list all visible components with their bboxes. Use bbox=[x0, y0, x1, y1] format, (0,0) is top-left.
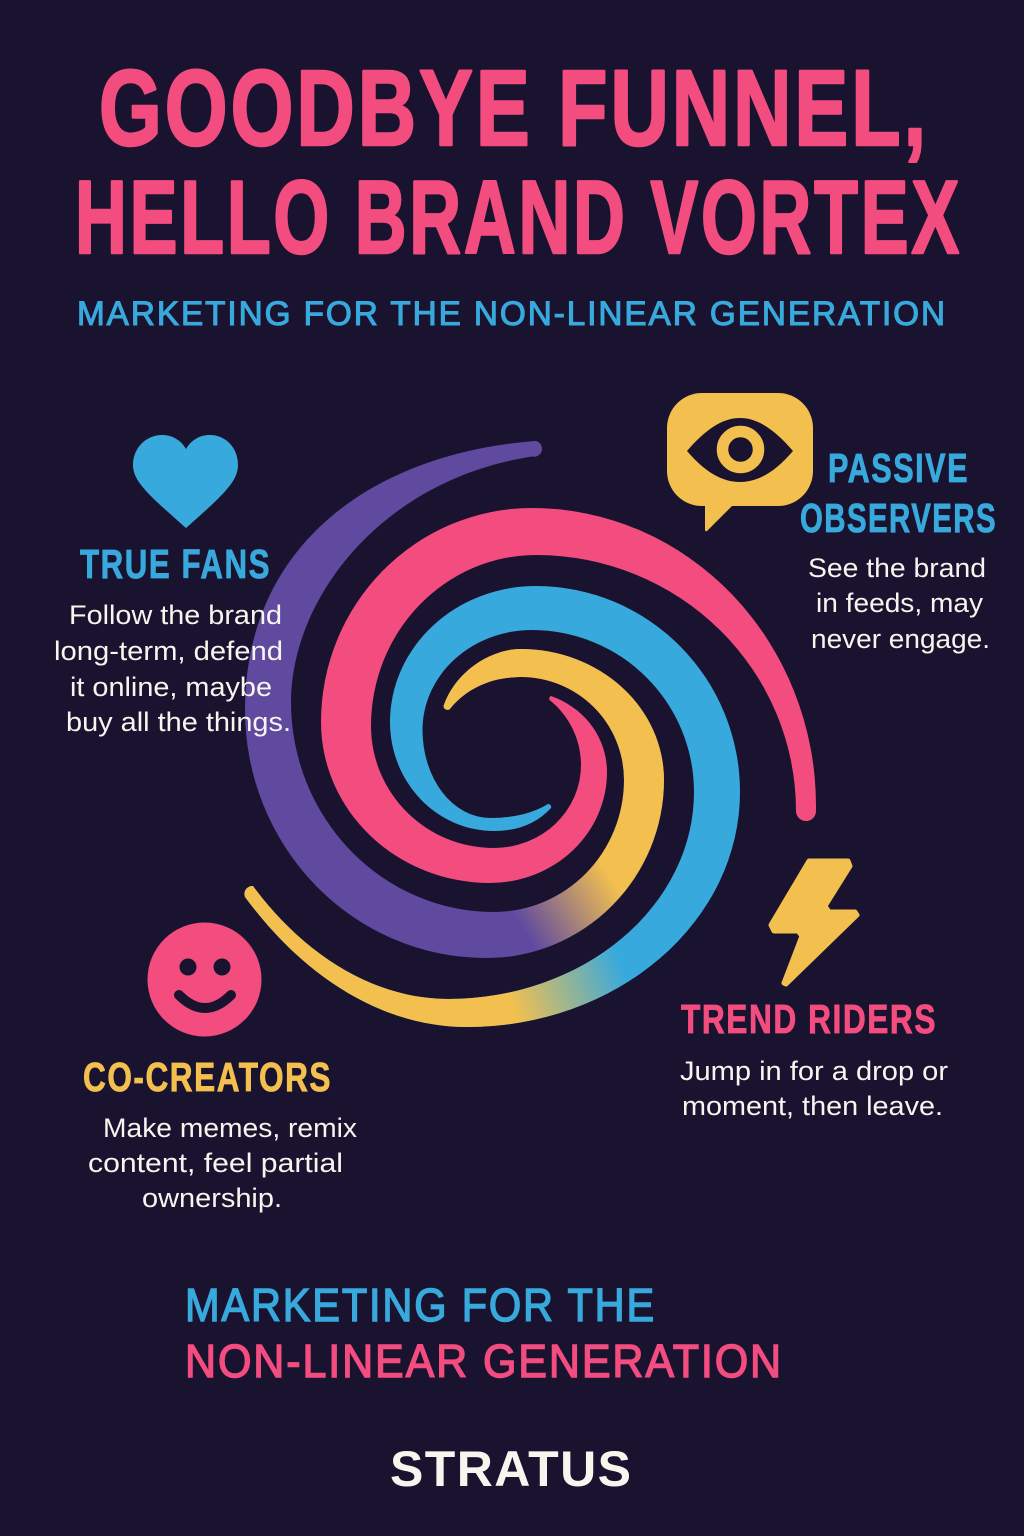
closing tagline: MARKETING FOR THE bbox=[185, 1279, 656, 1331]
text: true fans description: it online, maybe bbox=[70, 672, 272, 702]
heading: true fans: TRUE FANS bbox=[80, 541, 271, 587]
heading: passive observers bbox=[800, 445, 997, 541]
text: passive observers description: never engage. bbox=[811, 624, 990, 654]
panel: trend riders bbox=[680, 861, 948, 1121]
closing tagline bbox=[185, 1279, 783, 1387]
spiral arm: blue into yellow bbox=[244, 586, 740, 1027]
text: trend riders description bbox=[680, 1056, 948, 1121]
text: passive observers description: in feeds, may bbox=[816, 588, 984, 618]
panel: passive observers bbox=[667, 393, 997, 654]
text: co-creators description bbox=[88, 1113, 358, 1213]
text: passive observers description bbox=[808, 553, 990, 654]
panel: co-creators bbox=[83, 922, 358, 1213]
text: true fans description: buy all the things. bbox=[66, 707, 291, 737]
text: true fans description bbox=[54, 600, 291, 737]
text: co-creators description: Make memes, remix bbox=[103, 1113, 358, 1143]
subtitle: MARKETING FOR THE NON-LINEAR GENERATION bbox=[77, 295, 947, 333]
spiral arm: pink bbox=[321, 508, 816, 883]
text: co-creators description: ownership. bbox=[142, 1183, 282, 1213]
panel: true fans bbox=[54, 435, 291, 737]
title bbox=[75, 47, 962, 276]
text: true fans description: Follow the brand bbox=[69, 600, 282, 630]
closing tagline: NON-LINEAR GENERATION bbox=[185, 1335, 783, 1387]
text: co-creators description: content, feel partial bbox=[88, 1148, 343, 1178]
heading: trend riders: TREND RIDERS bbox=[681, 996, 937, 1042]
text: passive observers description: See the brand bbox=[808, 553, 986, 583]
brand vortex spiral bbox=[244, 441, 816, 1027]
text: trend riders description: moment, then leave. bbox=[682, 1091, 943, 1121]
brand logo: stratus: STRATUS bbox=[390, 1441, 631, 1497]
heading: passive observers: PASSIVE bbox=[828, 445, 969, 491]
icon: smiley face bbox=[148, 922, 262, 1036]
icon: heart bbox=[133, 435, 238, 528]
icon: lightning bolt bbox=[771, 861, 857, 984]
text: true fans description: long-term, defend bbox=[54, 636, 283, 666]
heading: co-creators: CO-CREATORS bbox=[83, 1054, 332, 1100]
icon: eye speech bubble bbox=[667, 393, 813, 531]
spiral arm: yellow into purple bbox=[245, 441, 664, 958]
text: trend riders description: Jump in for a drop or bbox=[680, 1056, 948, 1086]
